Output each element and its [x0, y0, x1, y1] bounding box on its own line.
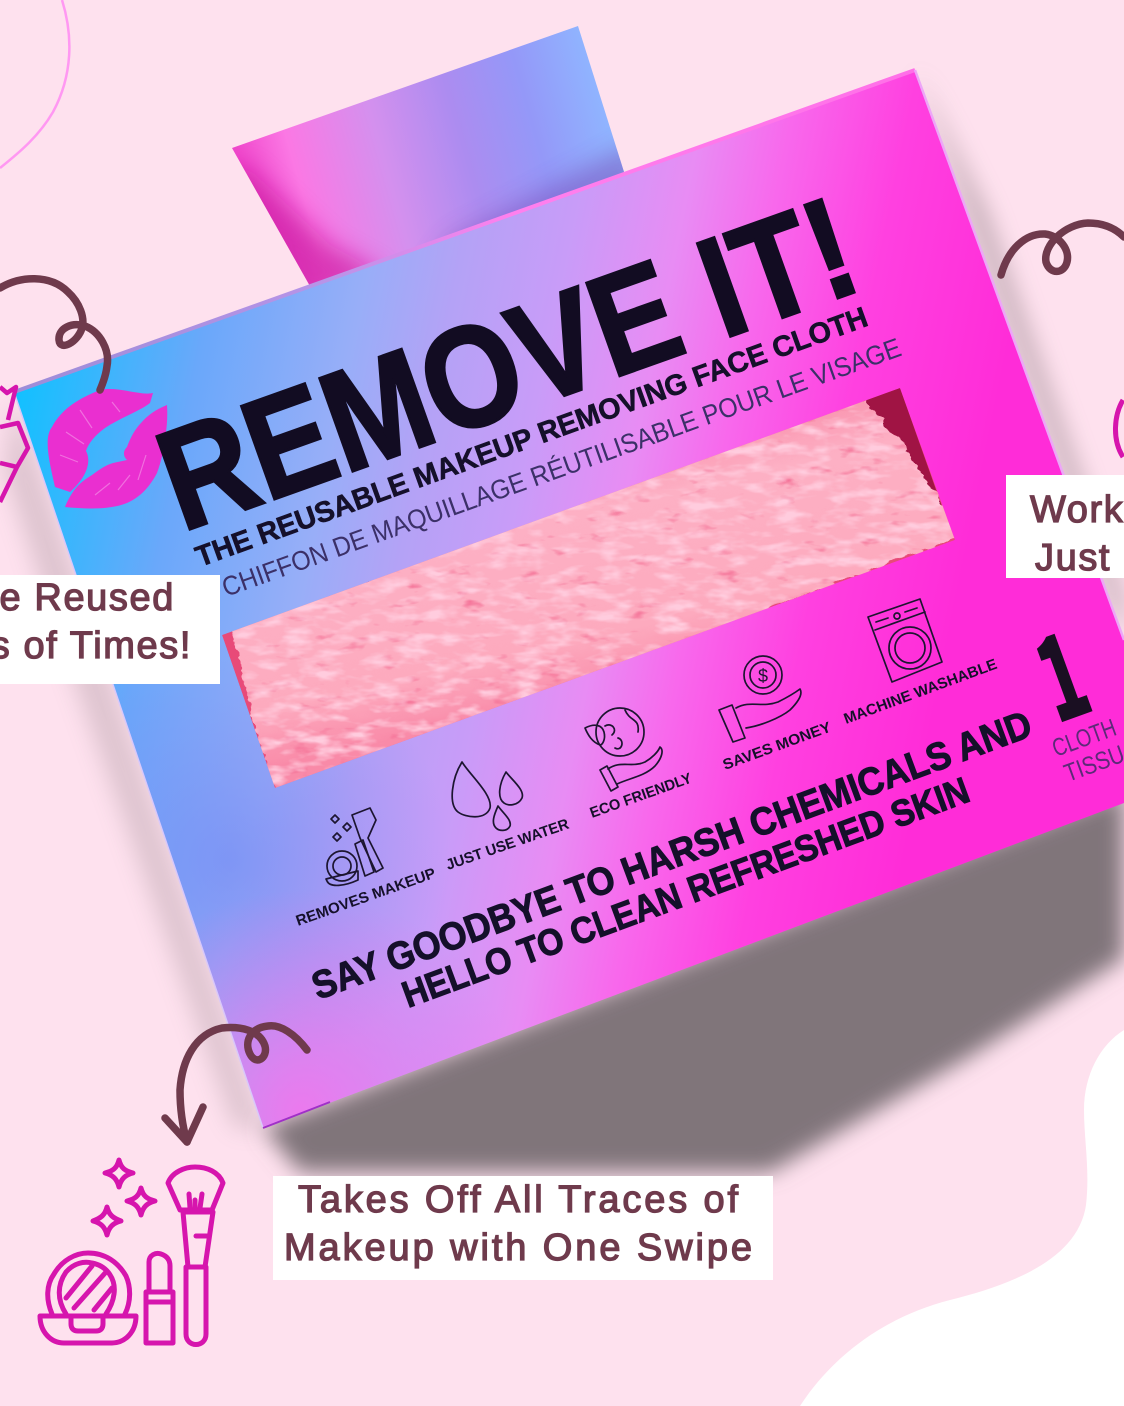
label: eco friendly: ECO FRIENDLY — [588, 770, 694, 822]
label: removes makeup: REMOVES MAKEUP — [294, 865, 438, 930]
top-left curved line — [0, 0, 69, 168]
caption: takes off makeup: Makeup with One Swipe — [284, 1227, 752, 1269]
caption: reuse — [0, 575, 220, 684]
icon: washing machine — [868, 599, 942, 682]
caption: water: Work — [1030, 489, 1124, 531]
feature labels — [294, 656, 999, 930]
label: machine washable: MACHINE WASHABLE — [842, 656, 999, 728]
slogan: HELLO TO CLEAN REFRESHED SKIN — [397, 770, 975, 1016]
feature icons row — [326, 599, 942, 885]
slogan: SAY GOODBYE TO HARSH CHEMICALS AND — [306, 703, 1038, 1008]
back panel of packaging — [232, 26, 624, 284]
box shadows — [5, 70, 1124, 1172]
caption: water: Just — [1035, 537, 1111, 579]
icon: lip print — [48, 389, 167, 508]
caption: takes off makeup — [273, 1176, 773, 1280]
subtitle french: CHIFFON DE MAQUILLAGE RÉUTILISABLE POUR LE VISAGE — [218, 332, 905, 603]
towel window — [222, 388, 962, 800]
icon: removes makeup — [326, 808, 383, 885]
caption: takes off makeup: Takes Off All Traces of — [298, 1179, 738, 1221]
icon: eco friendly — [585, 708, 662, 791]
icon: makeup set — [40, 1160, 223, 1344]
title: REMOVE IT!: REMOVE IT! — [139, 167, 876, 561]
arrow: right curl — [1001, 223, 1124, 275]
white corner blob — [800, 1030, 1124, 1406]
label: saves money: SAVES MONEY — [721, 719, 833, 774]
caption: reuse: e Reused — [0, 577, 175, 619]
arrow: top left curl — [0, 279, 108, 390]
arrow: bottom curl — [165, 1026, 307, 1142]
icon: water drops — [452, 762, 522, 830]
label: just use water: JUST USE WATER — [444, 816, 571, 874]
icon: partial right — [1115, 400, 1123, 457]
subtitle english: THE REUSABLE MAKEUP REMOVING FACE CLOTH — [192, 302, 872, 574]
caption: water — [1006, 475, 1124, 579]
product box — [0, 70, 1124, 1130]
icon: partial gem left — [0, 387, 28, 502]
icon: saves money — [719, 656, 801, 742]
icon: saves money: $ — [758, 666, 768, 686]
